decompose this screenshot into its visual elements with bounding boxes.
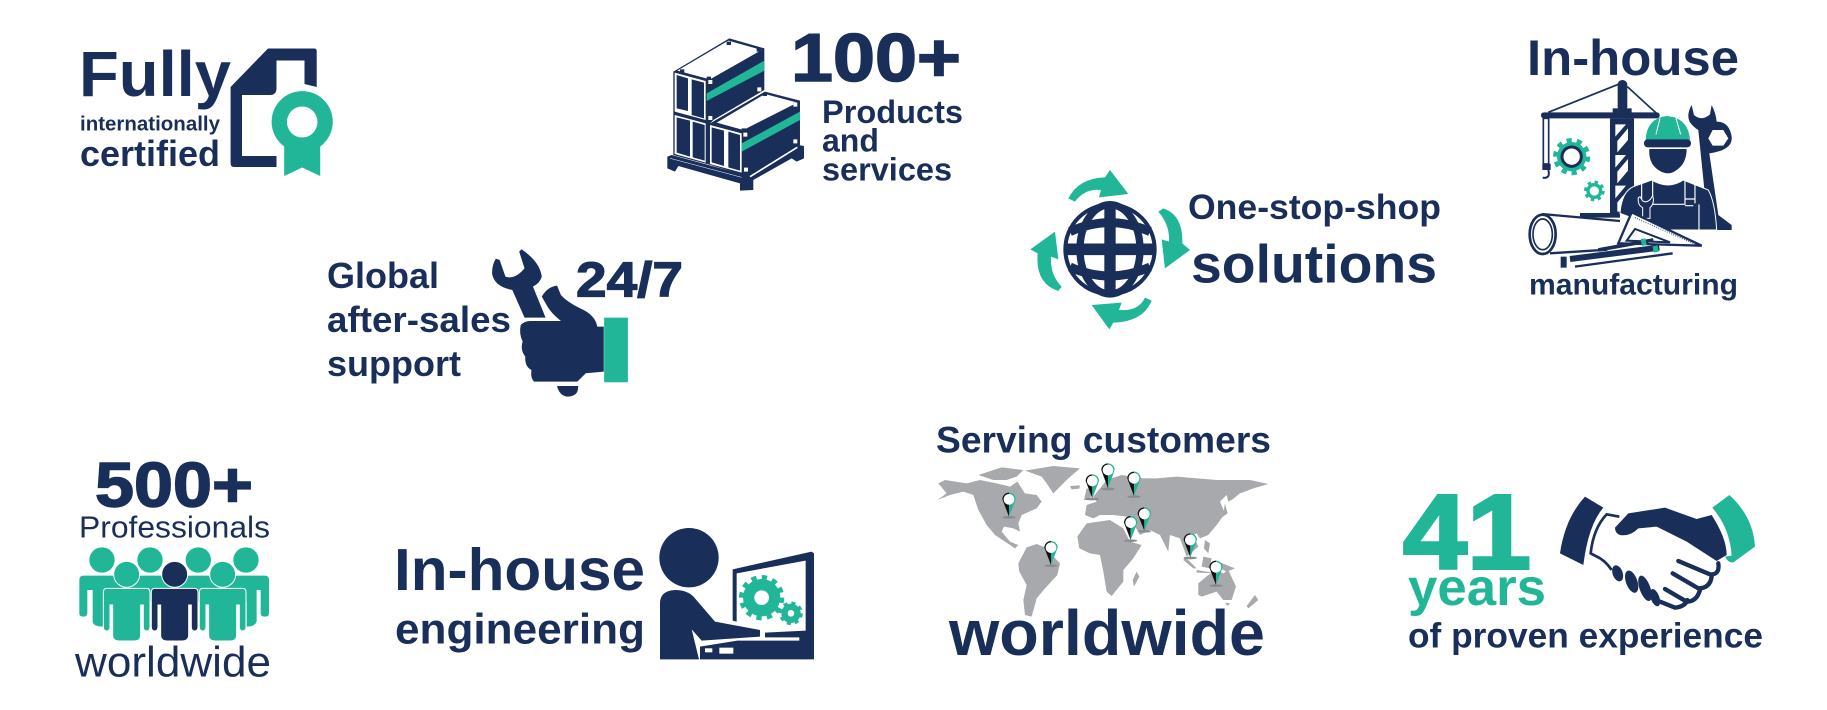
heading: worldwide: worldwide [948,597,1265,669]
text: worldwide: worldwide [74,639,271,687]
text: Products and services: and [822,123,879,159]
text: Global after-sales support: after-sales [327,299,511,340]
panel: in-house manufacturing [1527,30,1739,301]
heading: 24/7: 24/7 [576,254,683,308]
panel: in-house engineering [394,528,814,659]
text: One-stop-shop: One-stop-shop [1188,188,1441,227]
icon: globe with circular arrows [1030,170,1190,329]
heading: Serving customers: Serving customers [936,420,1271,461]
text: Global after-sales support: Global [327,255,439,296]
icon: hand holding wrench [492,249,628,397]
text: certified: certified [80,133,220,174]
panel: one-stop-shop solutions [1030,170,1441,329]
text: manufacturing: manufacturing [1529,268,1738,301]
text: of proven experience: of proven experience [1408,616,1763,655]
heading: Fully: Fully [79,38,231,110]
icon: certificate document with rosette [231,48,333,176]
panel: 100+ products and services [667,20,963,191]
icon: engineer at computer [659,528,814,659]
heading: 100+: 100+ [791,20,961,96]
text: Products and services: Products [822,94,963,130]
heading: In-house: In-house [1527,30,1739,86]
panel: serving customers worldwide [936,420,1271,669]
text: years: years [1408,559,1546,617]
panel: 41 years of proven experience [1403,473,1763,655]
chart: world map with location pins [937,463,1268,617]
text: Products and services: services [822,151,952,187]
number: 41: 41 [1403,473,1531,591]
icon: crane, gears, worker, wrench and blueprints [1529,80,1732,268]
heading: 500+: 500+ [95,451,253,521]
panel: 500+ professionals worldwide [74,451,271,687]
text: Products and services [822,94,963,187]
icon: group of people [79,547,269,641]
text: Global after-sales support: support [327,343,461,384]
panel: fully internationally certified [79,38,333,176]
panel: global after-sales support 24/7 [327,249,683,397]
icon: handshake [1560,495,1755,608]
text: Global after-sales support [327,255,511,384]
text: Professionals: Professionals [79,510,270,545]
text: engineering: engineering [395,605,645,653]
text: internationally: internationally [80,114,221,136]
heading: In-house: In-house [394,537,645,603]
icon: stacked containers on pallet [667,38,804,191]
heading: solutions: solutions [1191,235,1437,295]
